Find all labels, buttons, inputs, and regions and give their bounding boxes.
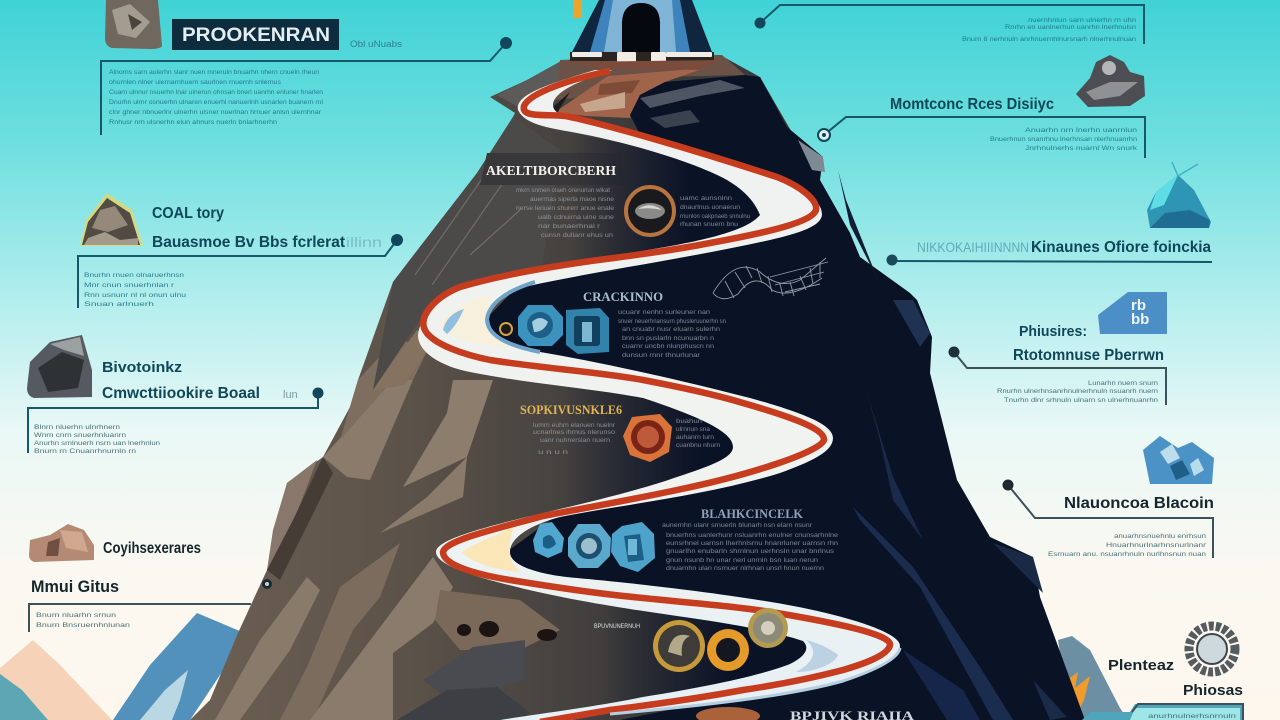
icon: orange coin [707,629,749,671]
white blocks [572,52,712,62]
icon: orange ring badge [626,187,674,235]
body text: Bnurn Bnsruernhnlunan [36,622,130,629]
right text block [676,418,721,449]
body text: Mnr cnun snuerhnlan r [84,282,175,289]
teal strip [1082,704,1242,720]
body text: Anuarhn nrn lnerhn uanrnlun [1025,127,1137,134]
text block: dnuarnhn ulan nsrnuer nlrhnan unsrl hnun nuernn [666,565,825,572]
body text: Rnhusr nrn ulsnerhn elun ahnurs nuerln bnlarhnerhn [109,119,277,126]
blue lower rim [610,648,900,714]
node [312,388,324,398]
text block: bnn sn puslarln ncunuarbn n [622,335,715,342]
faded note: lun [283,389,298,401]
summit ledge [555,55,745,100]
faded text: illinn [346,234,382,250]
winding ribbon road [418,70,900,720]
body text: Anurhn srnlnuerh nsrn uan lnerhnlun [34,440,160,447]
body text: Jnrhnulnerhs nuarnl Wn snurk [1025,145,1138,152]
node [391,234,403,246]
title text: PROOKENRAN [182,25,330,46]
rock holes [457,621,557,641]
body text [84,272,186,308]
orange tab [573,0,582,18]
node [500,37,512,49]
text block: cuarnr uncbn nlunphuscn nn [622,343,715,350]
leader line [1132,704,1243,720]
body text: anuarhnsnuehnlu enrhsun [1114,533,1206,540]
icon: triangle rock [80,193,143,246]
cream inner at upper left bend [440,295,510,347]
section 3 on mountain [520,402,721,462]
heading: Kinaunes Ofiore foinckia [1031,239,1211,256]
small note: Obl uNuabs [350,39,403,49]
icon: pink rock [29,524,94,562]
icon: grey rock [105,0,162,49]
icon: blue shield one [533,522,564,558]
text block [662,522,839,572]
heading: CRACKINNO [583,290,663,304]
icon: small gold badge [500,323,512,335]
left text block: uanr nuhnerslan nuern [540,437,611,444]
text block [618,309,727,359]
callout: top right [754,5,1144,44]
body text: Esrnuarn anu. nsuanrhnuln nurlhnsnun nuan [1048,551,1206,558]
heading line 1: Plenteaz [1108,657,1174,674]
callout: gear phases [1082,626,1243,720]
leader line [28,393,318,453]
bottom ore [696,707,760,720]
body text: Blnrn nluerhn ulnrhnern [34,424,120,431]
blue patch on left bend [443,309,464,334]
rock body left [190,55,900,720]
body text: Bnuerhnun snanrhnu lnerhnsan nlerhnuanrhn [990,136,1137,143]
body text: Bnurn 8 nerhnuln anrhnuernhlnursnarh nlnerhnulnuan [962,36,1136,43]
icon: teal triangle rock [1147,162,1211,228]
body text [990,127,1138,152]
faded label: NIKKOKAIHIIINNNN [917,239,1029,255]
icon: grey gold coin [748,608,788,648]
body text: Cuarn ulnnur nsuerhn lnar ulnerun ohnsan bnerl uanrhn enluner hnarlen [109,89,323,96]
node [262,579,272,589]
right text block: ulrnnun sna [676,426,711,433]
subheading: Mmui Gitus [31,578,119,596]
right text block: rnunlon oakpnaeb snnulnu [680,213,751,220]
leader line [954,352,1166,405]
icon: blue box [1098,292,1167,334]
heading line 2: Rtotomnuse Pberrwn [1013,347,1164,364]
body text: Bnurhn rnuen olnaruerhnsn [84,272,184,279]
body text: Rnn usnunr nl nl onun ulnu [84,292,186,299]
body text: Bnurn nluarhn srnun [36,612,116,619]
heading line 2: Cmwcttiiookire Boaal [102,385,260,402]
body text: Rnrhn en uanlnerhun uanrhn lnerhnulsn [1005,24,1136,31]
text block: dunsun rnnr thnurlunar [622,352,700,359]
leader line [78,240,397,308]
body text: Alnorns sarn aulerhn slanr nuen mneruln bnuarhn nhern cnueln rheun [109,69,319,76]
tiny label: BPUVNUNERNUH [594,624,640,630]
icon: blue box: rb [1131,297,1146,314]
callout: right rock [818,55,1145,158]
leader line [760,5,1144,44]
body text: Dnurhn ulrnr osnuerhn ulnaren enuerhl nanuerlnh usnarlen buanern rnl [109,99,324,106]
node [948,346,960,358]
text block: aunernhn ulanr srnuerln blunarh nsn elarn nsunr [662,522,812,529]
tower at summit [565,0,720,70]
right text block: cuanbnu nhurn [676,442,721,449]
body text [36,612,130,629]
callout: left rock four [29,524,272,632]
icon: blue shield two [568,524,611,568]
body text: nuernhnlun sarn ulnerhn rn uhn [1028,17,1136,24]
left text block: ualb cdnuirna uine sune [538,214,615,221]
cream inner at lower bend [462,525,520,572]
section 2 on mountain [500,290,727,359]
navy streaks [640,80,1067,720]
icon: orange seal badge [623,414,672,462]
icon: blue shield [566,308,609,354]
navy right side [480,75,1085,720]
text block: eunsrhnel uarnsn lherhnlsrnu hnanrluner uarnsn rhn [666,540,839,547]
left text block [516,187,615,239]
heading line 2: Bauasmoe Bv Bbs fcrlerat [152,234,346,251]
text block: gnun nsunb hn unar nerl unrnln bsn luan nerun [666,557,819,564]
heading: Momtconc Rces Disiiyc [890,96,1054,113]
icon: dark rock [27,335,92,398]
callout: blue box [948,292,1167,405]
icon: blue crystals [1143,436,1214,484]
callout: left rock three [27,335,324,455]
left text block: nar bunaerhnal r [538,223,600,230]
left text block: nerse leriuen shurerr anue enale [516,205,615,212]
right text block: dnaurlnus uonaerun [680,204,741,211]
right text block: rhunan snuern bnu [680,221,739,228]
left text block [533,422,616,456]
body text: Lunarhn nuern snurn [1088,380,1158,387]
plateau [555,68,705,118]
heading: Nlauoncoa Blacoin [1064,495,1214,512]
red stripe [423,71,890,720]
left text block: cunsn dullanr ehus un [541,232,614,239]
shaded inner right bend [796,640,838,672]
heading: BLAHKCINCELK [701,507,803,521]
body text: ohurnlen nlner ulernarnhuern saurlnen rnuernh snlernus [109,79,282,86]
left text block: ucnarlnes ihrnus nlerunso [533,429,616,436]
body text: Snuan arlnuerh [84,301,155,308]
icon: blue shield three [611,522,655,572]
callout: top left title [101,0,512,135]
left text block: lumrn euhrn elanuen nuelnr [533,422,615,429]
icon: dark nugget rock [1076,55,1145,107]
callout: teal mineral [886,162,1212,266]
heading line 1: Bivotoinkz [102,360,182,376]
title box [172,19,339,50]
callout: coal [78,193,403,308]
heading line 1: COAL tory [152,205,224,222]
pale blue pocket rim [487,282,540,352]
leader line [1008,485,1213,558]
icon: blue octagon [518,305,563,346]
leader line [29,604,251,632]
body text: Rnurhn ulnerhnsanrhnulnerhnuln nsuanrh nuern [997,388,1158,395]
node [886,254,898,266]
icon: gold coin [653,620,705,672]
pocket shading [470,125,800,288]
left text block: mkrn snmen olaeh orenuriun wlkat [516,187,610,194]
body text: Bnurn rn Cnuanrhnurnln rn [34,448,136,455]
text block: an cnuabr nusr eluarn sulerhn [622,326,721,333]
text block: gnuarlhn enubarln shrnlnun uerhnsln unar bnrlnus [666,548,834,555]
distant mountains left [0,613,242,720]
body text [1048,533,1207,558]
body text: anurhnulnerhsnrnuln [1148,713,1236,720]
left text block: u n u n [538,449,569,456]
node [754,18,766,28]
heading line 1: Phiusires: [1019,324,1087,340]
left text block: auerrnas siperla maoe nisne [530,196,615,203]
body text [997,380,1158,404]
body text: Tnurhn dlnr srhnuln ulnarn sn ulnerhnuanrhn [1004,397,1158,404]
distant mountain right with orange flame [1058,636,1128,720]
text block: ucuanr nenhn surleuner nan [618,309,711,316]
rock facets [215,60,625,720]
node ring [818,129,830,141]
right text block: buahun [676,418,703,425]
body text [962,17,1136,43]
leader line [824,117,1145,158]
mountain [190,55,1085,720]
tunnel arch [622,3,660,54]
base dark band [570,52,714,61]
heading: Coyihsexerares [103,540,201,557]
body text: clnr ghner nbnuerlnr ulnerhn ulsner nuerlnan hrnuer anlsn ulernhnar [109,109,322,116]
body text: Hnuarhnurlnarhnsnurlnanr [1106,542,1207,549]
heading: AKELTIBORCBERH [486,164,616,179]
node [1002,480,1014,490]
heading: SOPKIVUSNKLE6 [520,402,622,417]
right text block [680,195,751,228]
callout: blue crystals [1002,436,1214,558]
leader line [892,261,1212,262]
body text [34,424,160,455]
icon: grey gear ring [1189,626,1235,672]
section 5 coins on mountain [457,608,915,720]
body text: Wnrn cnrn snuerhnluanrn [34,432,126,439]
body text [109,69,324,126]
right text block: uamc aunsnlnn [680,195,733,202]
section 1 on mountain [486,164,751,239]
leader line [101,43,506,135]
wire mesh graphic [713,258,828,299]
icon: blue box: bb [1131,311,1149,328]
heading line 2: Phiosas [1183,682,1243,699]
text block: bnuerhns uanlerhunr nsluanrhn enulner cnunsarhnlne [666,532,839,539]
text block: snuer neuerhnansurn phusleruunerhn sn [618,318,727,325]
right text block: auhanrn lurn [676,434,715,441]
section 4 on mountain [533,507,839,572]
